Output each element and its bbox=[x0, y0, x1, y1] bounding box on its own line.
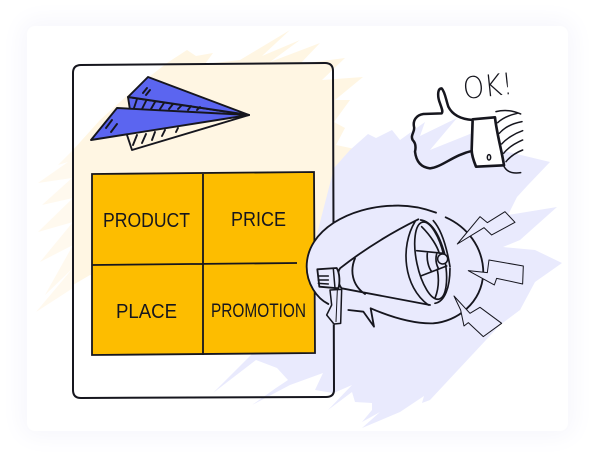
white lower wing bbox=[126, 115, 249, 150]
OK text: OK! bbox=[461, 67, 515, 107]
megaphone cap bbox=[438, 254, 448, 264]
lower blue wing bbox=[91, 108, 249, 140]
megaphone horn bbox=[338, 219, 430, 305]
label: price: PRICE bbox=[231, 209, 286, 231]
label: place: PLACE bbox=[116, 301, 177, 323]
background card bbox=[27, 26, 568, 431]
megaphone back bbox=[317, 268, 339, 288]
rim curves bbox=[406, 220, 450, 305]
cuff bbox=[472, 117, 504, 167]
label: product: PRODUCT bbox=[103, 210, 190, 232]
grid dividers bbox=[92, 174, 297, 355]
inner ellipse bbox=[409, 219, 453, 302]
megaphone grip bbox=[327, 289, 342, 324]
pale brush streaks left of the document bbox=[36, 150, 73, 312]
thumbs up icon bbox=[412, 88, 523, 173]
folded stripe bbox=[128, 97, 249, 115]
grip line bbox=[336, 290, 337, 322]
inner cross lines bbox=[417, 227, 447, 298]
label: promotion: PROMOTION bbox=[211, 301, 306, 322]
sleeve hatching bbox=[496, 110, 523, 173]
document outline bbox=[73, 63, 334, 398]
4P grid bbox=[92, 172, 315, 355]
grid fill bbox=[92, 172, 315, 355]
lightning bolt 3 bbox=[454, 296, 502, 337]
megaphone rim bbox=[406, 219, 453, 305]
lavender brush stroke bbox=[213, 118, 562, 428]
paper plane bbox=[91, 77, 249, 150]
speech bubble with megaphone bbox=[307, 206, 523, 337]
cuff button bbox=[487, 155, 491, 160]
lightning bolt 1 bbox=[457, 212, 515, 244]
bubble outline bbox=[307, 206, 483, 327]
yellow brush stroke bbox=[73, 30, 377, 285]
bubble fill bbox=[307, 206, 483, 327]
upper blue wing bbox=[128, 77, 249, 115]
hand bbox=[412, 88, 473, 168]
hatching bbox=[106, 88, 200, 145]
lightning bolt 2 bbox=[468, 260, 523, 285]
back details bbox=[318, 269, 335, 288]
